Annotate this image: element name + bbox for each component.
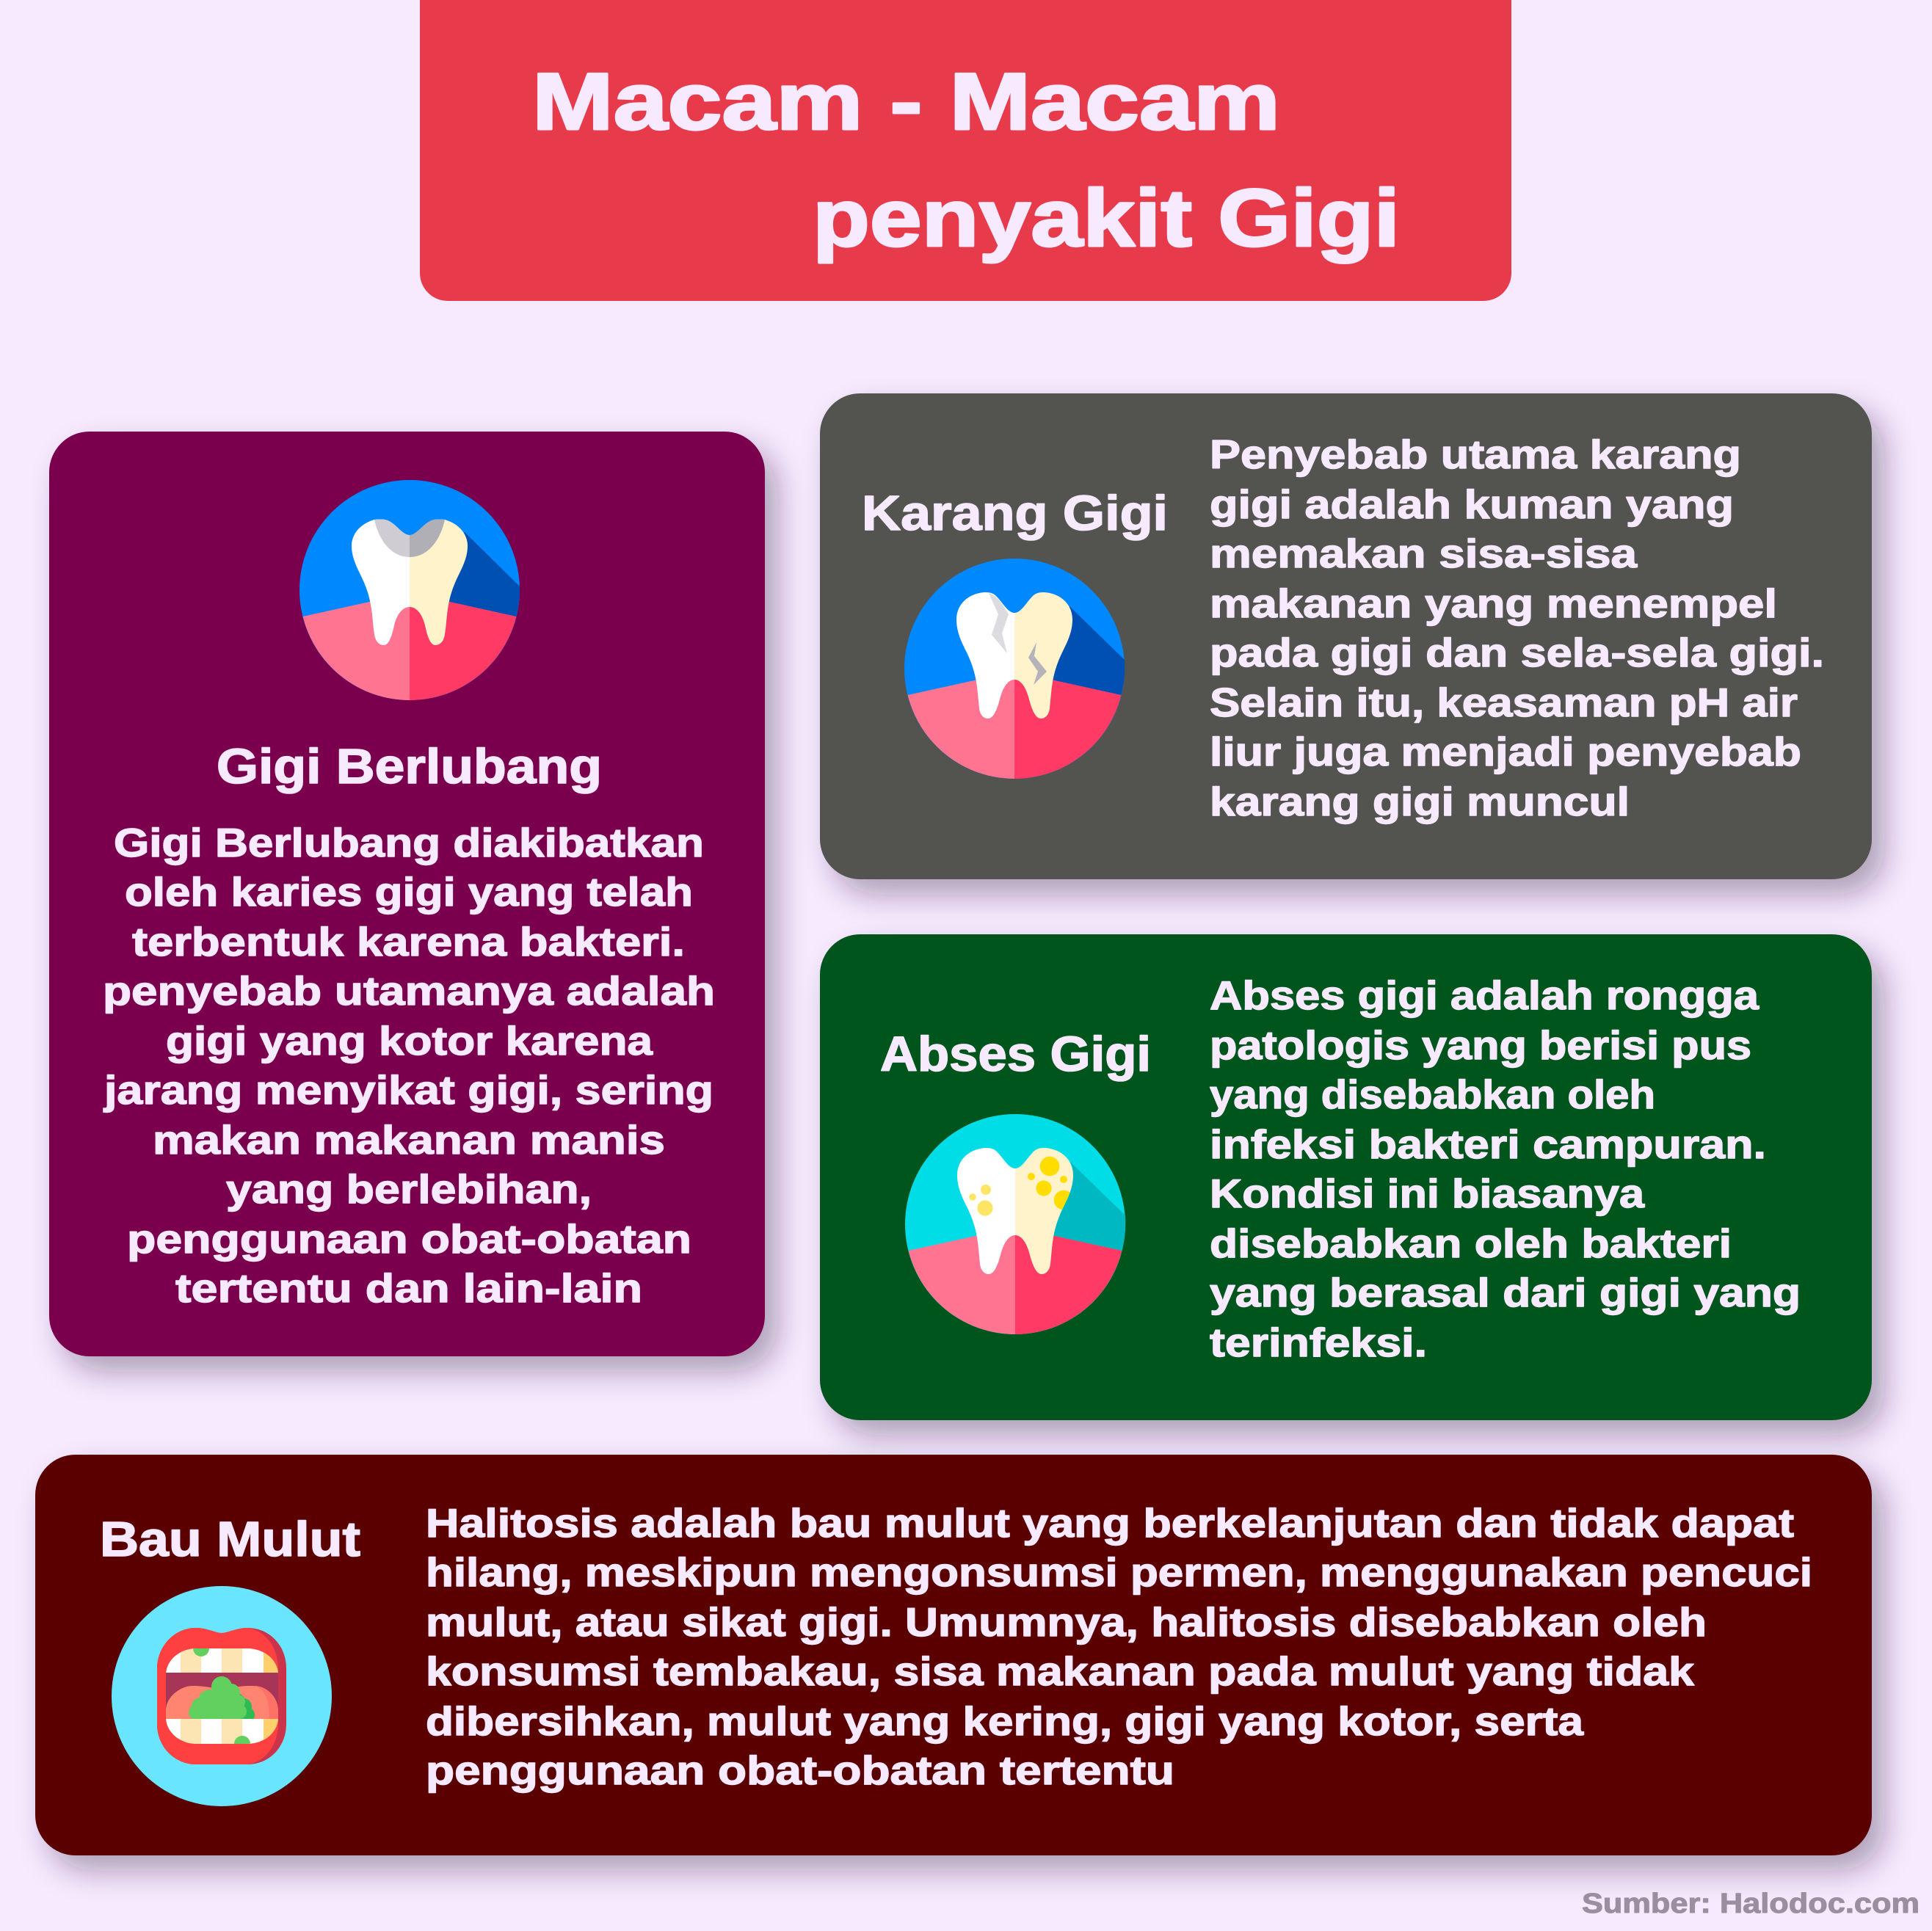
panel: Bau Mulut	[35, 1455, 1872, 1855]
text block: Bau Mulut description: konsumsi tembakau, sisa makanan pada mulut yang tidak	[426, 1648, 1694, 1694]
text block: Gigi Berlubang description: gigi yang kotor karena	[166, 1018, 653, 1063]
title text line 2: penyakit Gigi	[813, 173, 1400, 263]
icon: tooth with cavity	[299, 480, 520, 700]
text block: Gigi Berlubang description: penggunaan obat-obatan	[127, 1216, 691, 1262]
heading: Gigi Berlubang: Gigi Berlubang	[217, 739, 602, 794]
text block: Gigi Berlubang description: Gigi Berlubang diakibatkan	[114, 820, 704, 865]
text block: Abses Gigi description: yang berasal dari gigi yang	[1210, 1270, 1801, 1315]
heading: Abses Gigi: Abses Gigi	[880, 1027, 1151, 1082]
text block: Abses Gigi description: disebabkan oleh bakteri	[1210, 1221, 1732, 1266]
text block: Bau Mulut description: Halitosis adalah bau mulut yang berkelanjutan dan tidak dapat	[426, 1500, 1794, 1546]
text block: Bau Mulut description: hilang, meskipun mengonsumsi permen, menggunakan pencuci	[426, 1549, 1812, 1595]
text block: Karang Gigi description: Selain itu, keasaman pH air	[1210, 680, 1798, 725]
icon: infected tooth	[905, 1114, 1125, 1334]
text block: Abses Gigi description	[1210, 972, 1801, 1365]
text block: Bau Mulut description: mulut, atau sikat gigi. Umumnya, halitosis disebabkan oleh	[426, 1599, 1707, 1645]
text block: Karang Gigi description	[1210, 432, 1824, 824]
icon: open mouth	[112, 1586, 332, 1806]
text block: Bau Mulut description: dibersihkan, mulut yang kering, gigi yang kotor, serta	[426, 1698, 1583, 1744]
text block: Abses Gigi description: yang disebabkan oleh	[1210, 1072, 1655, 1117]
text block: Abses Gigi description: terinfeksi.	[1210, 1320, 1427, 1365]
text block: Gigi Berlubang description	[103, 820, 715, 1311]
text block: Gigi Berlubang description: yang berlebihan,	[226, 1166, 592, 1212]
title banner	[420, 0, 1511, 301]
text block: Bau Mulut description	[426, 1500, 1812, 1793]
title text line 1: Macam - Macam	[532, 57, 1280, 147]
text block: Gigi Berlubang description: oleh karies gigi yang telah	[125, 869, 693, 914]
text block: Abses Gigi description: patologis yang berisi pus	[1210, 1022, 1751, 1068]
text block: Karang Gigi description: memakan sisa-sisa	[1210, 531, 1637, 576]
text block: Karang Gigi description: gigi adalah kuman yang	[1210, 481, 1734, 527]
panel: Gigi Berlubang	[49, 432, 765, 1356]
source credit: Sumber: Halodoc.com	[1582, 1888, 1920, 1919]
text block: Abses Gigi description: Kondisi ini biasanya	[1210, 1171, 1644, 1216]
text block: Karang Gigi description: makanan yang menempel	[1210, 581, 1777, 626]
text block: Karang Gigi description: karang gigi muncul	[1210, 779, 1630, 824]
text block: Gigi Berlubang description: jarang menyikat gigi, sering	[104, 1067, 713, 1113]
panel: Abses Gigi	[820, 934, 1872, 1420]
text block: Gigi Berlubang description: tertentu dan lain-lain	[175, 1265, 642, 1311]
text block: Karang Gigi description: liur juga menjadi penyebab	[1210, 729, 1801, 774]
text block: Karang Gigi description: Penyebab utama karang	[1210, 432, 1741, 477]
icon: cracked tooth	[904, 559, 1125, 779]
text block: Gigi Berlubang description: makan makanan manis	[153, 1117, 665, 1163]
text block: Gigi Berlubang description: penyebab utamanya adalah	[103, 968, 715, 1014]
heading: Karang Gigi: Karang Gigi	[862, 486, 1168, 541]
text block: Gigi Berlubang description: terbentuk karena bakteri.	[132, 919, 685, 964]
heading: Bau Mulut: Bau Mulut	[100, 1512, 360, 1567]
panel: Karang Gigi	[820, 393, 1872, 879]
text block: Karang Gigi description: pada gigi dan sela-sela gigi.	[1210, 630, 1824, 675]
text block: Abses Gigi description: Abses gigi adalah rongga	[1210, 972, 1759, 1018]
text block: Abses Gigi description: infeksi bakteri campuran.	[1210, 1121, 1766, 1167]
text block: Bau Mulut description: penggunaan obat-obatan tertentu	[426, 1748, 1174, 1793]
